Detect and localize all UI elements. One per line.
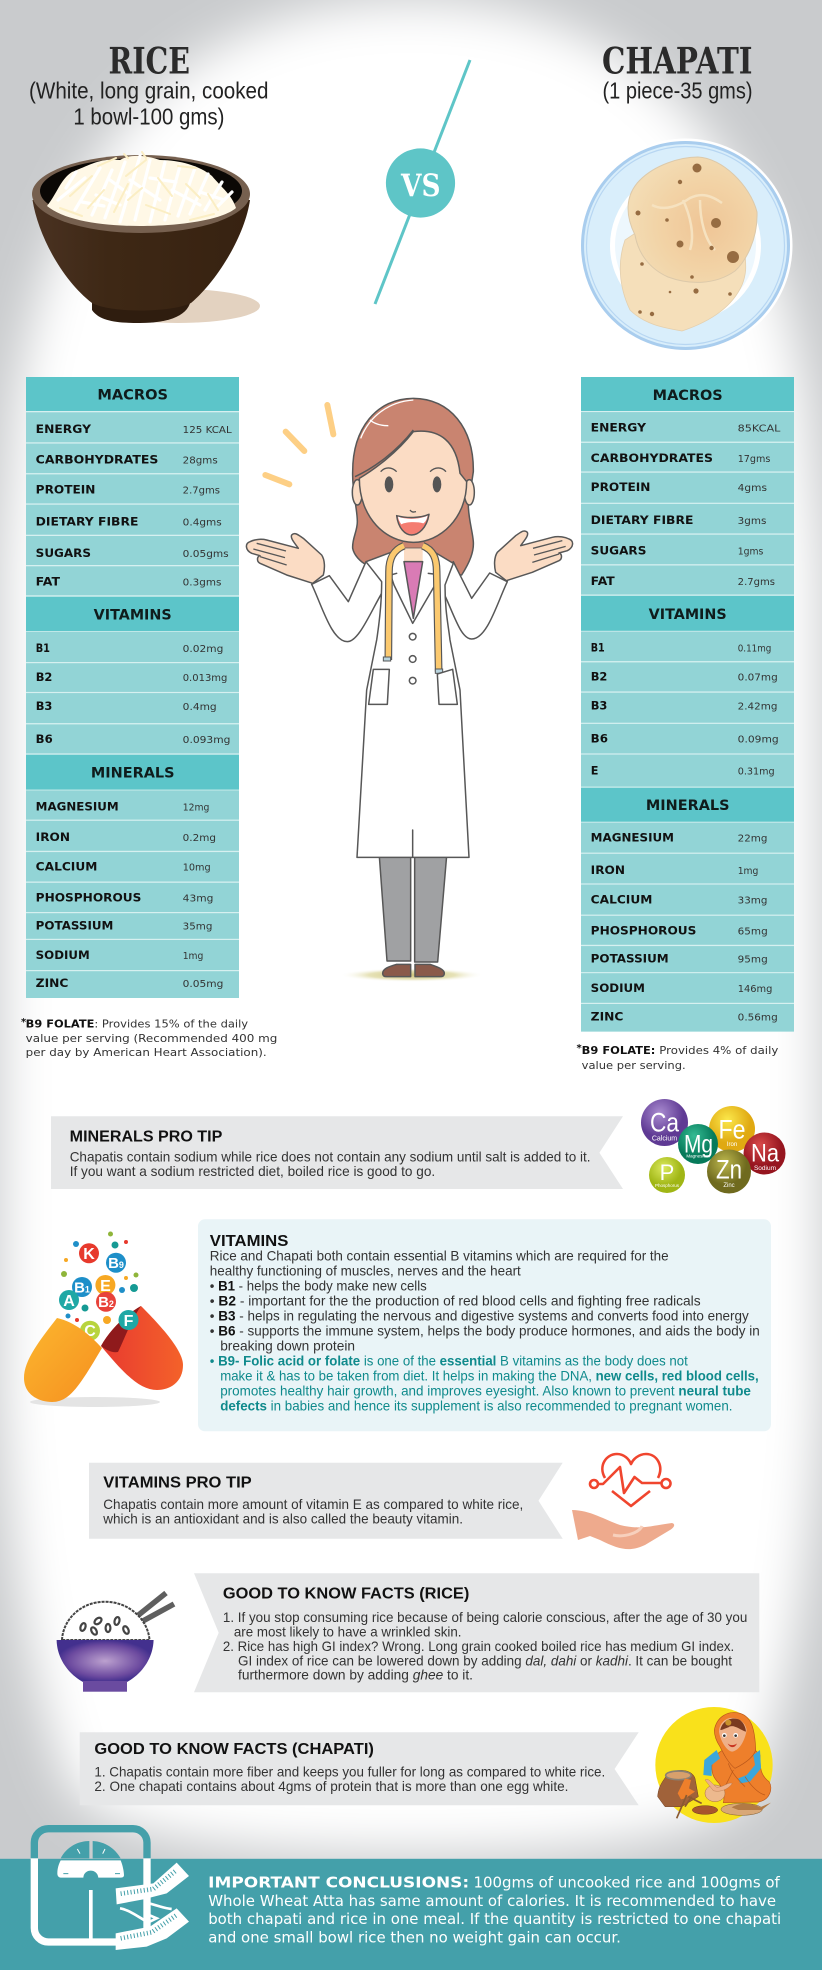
row: protein: PROTEIN — [36, 482, 95, 496]
right hand — [495, 531, 573, 581]
row: dietary fibre — [581, 504, 794, 533]
row: b1: B1 — [591, 641, 605, 655]
title: rice — [29, 40, 268, 129]
icon: mineral spheres: Ca — [650, 1108, 680, 1138]
vitamin balls — [59, 1243, 126, 1341]
sparks — [265, 405, 333, 484]
right arm — [440, 562, 507, 639]
heading: rice macros: MACROS — [97, 388, 168, 404]
left hand — [246, 534, 324, 583]
row: sugars — [581, 535, 794, 564]
row: b6 — [581, 724, 794, 753]
row: zinc: 0.56mg — [738, 1012, 778, 1023]
row: iron: IRON — [36, 830, 70, 844]
row: sugars: 1gms — [738, 546, 763, 557]
icon: chapati on plate — [578, 138, 792, 352]
row: dietary fibre: DIETARY FIBRE — [36, 515, 138, 529]
panel: important conclusions: IMPORTANT CONCLUSIONS: — [208, 1874, 469, 1892]
callout: vitamins pro tip: Chapatis contain more amount of vitamin E as compared to white rice, — [103, 1496, 523, 1512]
callout: good to know facts rice: are most likely to have a wrinkled skin. — [234, 1624, 462, 1640]
heading: rice vitamins — [26, 597, 239, 631]
callout: good to know facts rice — [194, 1573, 759, 1692]
panel: vitamins: • B9- Folic acid or folate is one of the essential B vitamins as the body does not — [210, 1352, 688, 1368]
callout: good to know facts rice: GOOD TO KNOW FACTS (RICE) — [223, 1585, 469, 1602]
row: calcium: CALCIUM — [591, 893, 652, 907]
row: energy: 85KCAL — [738, 424, 781, 435]
panel: vitamins: defects in babies and hence its supplement is also recommended to pregnant women. — [220, 1397, 732, 1413]
vitamin balls: B9 — [108, 1255, 124, 1272]
row: potassium: POTASSIUM — [591, 952, 669, 966]
row: magnesium: MAGNESIUM — [591, 830, 674, 844]
row: fat: 0.3gms — [183, 578, 221, 588]
panel: vitamins: make it & has to be taken from diet. It helps in making the DNA, new cells, red blood cells, — [220, 1367, 759, 1383]
row: energy — [581, 412, 794, 442]
row: protein — [581, 473, 794, 503]
row: e — [581, 755, 794, 787]
row: b2: B2 — [36, 670, 52, 684]
panel: rice nutrition table — [26, 377, 239, 998]
title: rice: (White, long grain, cooked — [29, 77, 268, 103]
callout: minerals pro tip: MINERALS PRO TIP — [70, 1129, 223, 1146]
row: energy — [26, 412, 239, 442]
row: b3: 0.4mg — [183, 702, 217, 713]
row: magnesium: 12mg — [183, 802, 209, 814]
row: b3: 2.42mg — [738, 702, 777, 712]
row: dietary fibre: 3gms — [738, 516, 766, 527]
hair back — [353, 398, 473, 575]
coat — [357, 548, 469, 857]
panel: vitamins: healthy functioning of muscles, nerves and the heart — [210, 1263, 521, 1279]
panel: vitamins: • B1 - helps the body make new cells — [210, 1278, 427, 1294]
versus divider — [375, 60, 470, 304]
callout: minerals pro tip — [51, 1116, 623, 1189]
heading: rice vitamins: VITAMINS — [94, 607, 172, 623]
panel: vitamins: • B6 - supports the immune system, helps the body produce hormones, and aids the body in — [210, 1323, 760, 1339]
title: chapati — [602, 40, 752, 103]
callout: good to know facts chapati: 2. One chapati contains about 4gms of protein that is more than one egg white. — [94, 1778, 568, 1794]
row: potassium — [581, 946, 794, 972]
row: zinc — [581, 1004, 794, 1032]
icon: mineral spheres: Magnesium — [686, 1154, 710, 1158]
row: zinc: ZINC — [591, 1009, 623, 1023]
row: dietary fibre: 0.4gms — [183, 518, 222, 529]
footnote: rice folate: B9 FOLATE — [26, 1018, 94, 1031]
row: b1 — [26, 632, 239, 662]
panel: important conclusions: 100gms of uncooked rice and 100gms of — [474, 1874, 780, 1892]
callout: good to know facts rice: 1. If you stop consuming rice because of being calorie conscious, after the age of 30 you — [223, 1609, 747, 1625]
callout: minerals pro tip: If you want a sodium restricted diet, boiled rice is good to go. — [70, 1163, 435, 1179]
row: b3: B3 — [36, 699, 52, 713]
row: sodium: 146mg — [738, 984, 772, 995]
tape — [388, 546, 439, 672]
row: e: E — [591, 764, 598, 778]
trousers — [379, 852, 447, 962]
row: carbohydrates: 28gms — [183, 456, 218, 467]
title: chapati: (1 piece-35 gms) — [602, 77, 752, 103]
row: b3: B3 — [591, 698, 607, 712]
icon: mineral spheres: P — [660, 1160, 674, 1185]
icon: mineral spheres: Calcium — [652, 1136, 677, 1142]
icon: mineral spheres: Phosphorus — [655, 1183, 680, 1188]
panel: vitamins: Rice and Chapati both contain essential B vitamins which are required for the — [210, 1248, 669, 1264]
icon: mineral spheres: Iron — [727, 1142, 737, 1148]
sari body — [712, 1748, 771, 1803]
row: b1: B1 — [36, 641, 50, 655]
icon: mineral spheres: Zn — [716, 1154, 742, 1184]
row: magnesium: 22mg — [738, 833, 767, 844]
row: b1: 0.11mg — [738, 644, 771, 655]
callout: vitamins pro tip: VITAMINS PRO TIP — [103, 1475, 252, 1492]
row: b1: 0.02mg — [183, 644, 223, 655]
panel: vitamins: • B3 - helps in regulating the nervous and digestive systems and converts food into energy — [210, 1308, 749, 1324]
panel: important conclusions — [0, 1859, 822, 1970]
callout: vitamins pro tip: which is an antioxidant and is also called the beauty vitamin. — [102, 1510, 463, 1526]
vitamin balls: B2 — [98, 1294, 114, 1311]
row: protein: 2.7gms — [183, 486, 220, 496]
title: chapati: CHAPATI — [602, 40, 752, 82]
row: e: 0.31mg — [738, 767, 775, 778]
panel: important conclusions: and one small bowl rice then no weight gain can occur. — [208, 1928, 621, 1946]
row: iron: IRON — [591, 863, 625, 877]
footnote: rice folate: : Provides 15% of the daily — [94, 1018, 249, 1031]
capsule halves — [24, 1318, 102, 1402]
row: energy: ENERGY — [36, 422, 92, 436]
callout: good to know facts rice: furthermore down by adding ghee to it. — [238, 1666, 473, 1682]
row: iron: 0.2mg — [183, 833, 216, 844]
row: b6: 0.09mg — [738, 734, 779, 746]
row: fat — [26, 566, 239, 595]
row: iron — [26, 821, 239, 851]
footnote: chapati folate — [576, 1043, 779, 1072]
row: b6: B6 — [591, 732, 608, 746]
title: rice: RICE — [108, 40, 190, 82]
row: potassium — [26, 913, 239, 939]
footnote: rice folate: per day by American Heart Association). — [26, 1046, 267, 1059]
row: sugars: SUGARS — [36, 546, 91, 560]
row: phosphorous: 43mg — [183, 894, 213, 904]
row: fat: 2.7gms — [738, 577, 775, 588]
icon: mineral spheres: Na — [751, 1140, 779, 1168]
row: fat: FAT — [36, 574, 60, 588]
footnote: chapati folate: value per serving. — [582, 1059, 686, 1072]
panel: vitamins: • B2 - important for the the production of red blood cells and fighting free radicals — [210, 1293, 701, 1309]
icon: vitamin capsule: F — [124, 1313, 134, 1330]
row: sodium: SODIUM — [591, 981, 645, 995]
panel: important conclusions: Whole Wheat Atta has same amount of calories. It is recommended to have — [208, 1892, 776, 1910]
row: potassium: 35mg — [183, 922, 212, 933]
row: phosphorous: PHOSPHOROUS — [591, 923, 696, 937]
callout: good to know facts rice: GI index of rice can be lowered down by adding dal, dahi or kadhi. It can be bought — [238, 1652, 732, 1668]
row: carbohydrates: 17gms — [738, 454, 770, 465]
callout: vitamins pro tip — [89, 1463, 563, 1539]
panel: vitamins: breaking down protein — [220, 1337, 355, 1353]
icon: heart in hand — [572, 1454, 674, 1549]
row: protein: PROTEIN — [591, 480, 650, 494]
icon: mineral spheres — [641, 1099, 786, 1194]
row: fat: FAT — [591, 574, 615, 588]
row: sodium: SODIUM — [36, 948, 90, 962]
callout: good to know facts chapati — [80, 1732, 639, 1805]
row: magnesium — [26, 790, 239, 820]
row: b2: 0.013mg — [183, 673, 227, 684]
row: sugars: SUGARS — [591, 543, 646, 557]
icon: vitamin capsule — [24, 1232, 183, 1407]
row: b2 — [581, 662, 794, 691]
icon: rice bowl — [32, 152, 260, 323]
row: b6: 0.093mg — [183, 735, 230, 746]
face — [359, 431, 467, 542]
heading: chapati macros — [581, 377, 794, 411]
row: calcium — [26, 852, 239, 882]
row: carbohydrates — [581, 443, 794, 471]
row: energy: ENERGY — [591, 421, 647, 435]
row: magnesium: MAGNESIUM — [36, 800, 119, 814]
icon: mineral spheres: Sodium — [754, 1165, 776, 1172]
heading: chapati vitamins: VITAMINS — [649, 607, 727, 623]
row: zinc — [26, 971, 239, 998]
row: sodium — [26, 940, 239, 970]
buttons — [409, 633, 416, 640]
row: iron — [581, 854, 794, 883]
title: rice: 1 bowl-100 gms) — [73, 103, 224, 129]
versus divider: VS — [400, 168, 440, 204]
illustration: doctor — [246, 398, 573, 982]
heading: rice minerals: MINERALS — [91, 765, 175, 781]
row: b3 — [581, 693, 794, 723]
row: sodium: 1mg — [183, 951, 203, 962]
vitamin balls: C — [84, 1323, 96, 1340]
row: calcium — [581, 885, 794, 915]
pink shirt and neck — [404, 548, 423, 618]
vitamin balls: A — [63, 1293, 75, 1310]
row: dietary fibre — [26, 505, 239, 535]
panel: important conclusions: both chapati and rice in one meal. If the quantity is restricted to one chapati — [208, 1910, 781, 1928]
left arm — [312, 562, 387, 642]
panel: vitamins: promotes healthy hair growth, and improves eyesight. Also known to prevent neural tube — [220, 1382, 751, 1398]
row: b1 — [581, 632, 794, 661]
row: fat — [581, 566, 794, 594]
row: protein — [26, 474, 239, 503]
row: zinc: 0.05mg — [183, 979, 223, 990]
row: b2 — [26, 663, 239, 692]
row: b2: 0.07mg — [738, 672, 778, 684]
illustration: woman making chapati — [655, 1707, 773, 1823]
panel: chapati nutrition table — [581, 377, 794, 1032]
row: protein: 4gms — [738, 483, 767, 494]
row: energy: 125 KCAL — [183, 425, 232, 436]
vitamin balls: K — [83, 1246, 95, 1263]
icon: mineral spheres: Fe — [718, 1114, 746, 1144]
footnote: rice folate: * — [21, 1017, 27, 1028]
footnote: rice folate: value per serving (Recommended 400 mg — [26, 1032, 277, 1045]
row: sodium — [581, 973, 794, 1003]
row: potassium: POTASSIUM — [36, 919, 113, 933]
row: zinc: ZINC — [36, 976, 68, 990]
ears — [352, 480, 362, 505]
row: magnesium — [581, 823, 794, 853]
panel: vitamins: VITAMINS — [210, 1233, 289, 1250]
row: calcium: 10mg — [183, 863, 211, 874]
row: sugars — [26, 536, 239, 565]
pockets — [369, 669, 457, 704]
icon: mineral spheres: Zinc — [723, 1183, 735, 1189]
callout: good to know facts chapati: 1. Chapatis contain more fiber and keeps you fuller for long as compared to white rice. — [94, 1764, 605, 1780]
row: b2: B2 — [591, 670, 607, 684]
footnote: rice folate — [21, 1017, 277, 1059]
row: b6 — [26, 724, 239, 753]
row: b6: B6 — [36, 732, 53, 746]
vitamin balls: B1 — [74, 1280, 90, 1296]
shoes — [383, 964, 444, 977]
panel: vitamins — [198, 1219, 771, 1431]
icon: weighing scale and tape — [34, 1829, 189, 1950]
icon: mineral spheres: Mg — [684, 1130, 713, 1158]
row: phosphorous — [581, 916, 794, 945]
callout: good to know facts rice: 2. Rice has high GI index? Wrong. Long grain cooked boiled rice has medium GI index. — [223, 1638, 734, 1654]
heading: rice macros — [26, 377, 239, 411]
heading: rice minerals — [26, 755, 239, 790]
row: b3 — [26, 693, 239, 723]
row: carbohydrates: CARBOHYDRATES — [591, 451, 713, 465]
row: carbohydrates: CARBOHYDRATES — [36, 453, 158, 467]
heading: chapati minerals: MINERALS — [646, 798, 730, 814]
icon: purple rice bowl — [57, 1593, 174, 1692]
vitamin balls: E — [100, 1278, 111, 1295]
heading: chapati minerals — [581, 788, 794, 822]
footnote: chapati folate: B9 FOLATE: — [582, 1044, 655, 1057]
callout: minerals pro tip: Chapatis contain sodium while rice does not contain any sodium until salt is added to it. — [70, 1149, 590, 1165]
row: phosphorous: 65mg — [738, 926, 768, 937]
row: calcium: 33mg — [738, 896, 767, 907]
heading: chapati macros: MACROS — [653, 388, 723, 404]
row: iron: 1mg — [738, 866, 758, 877]
heading: chapati vitamins — [581, 596, 794, 631]
row: phosphorous — [26, 883, 239, 912]
row: phosphorous: PHOSPHOROUS — [36, 890, 141, 904]
row: calcium: CALCIUM — [36, 860, 97, 874]
callout: good to know facts chapati: GOOD TO KNOW FACTS (CHAPATI) — [94, 1741, 374, 1758]
row: potassium: 95mg — [738, 954, 768, 966]
row: dietary fibre: DIETARY FIBRE — [591, 513, 693, 527]
footnote: chapati folate: * — [576, 1043, 582, 1054]
row: carbohydrates — [26, 444, 239, 473]
footnote: chapati folate: Provides 4% of daily — [659, 1044, 779, 1057]
row: sugars: 0.05gms — [183, 549, 229, 560]
